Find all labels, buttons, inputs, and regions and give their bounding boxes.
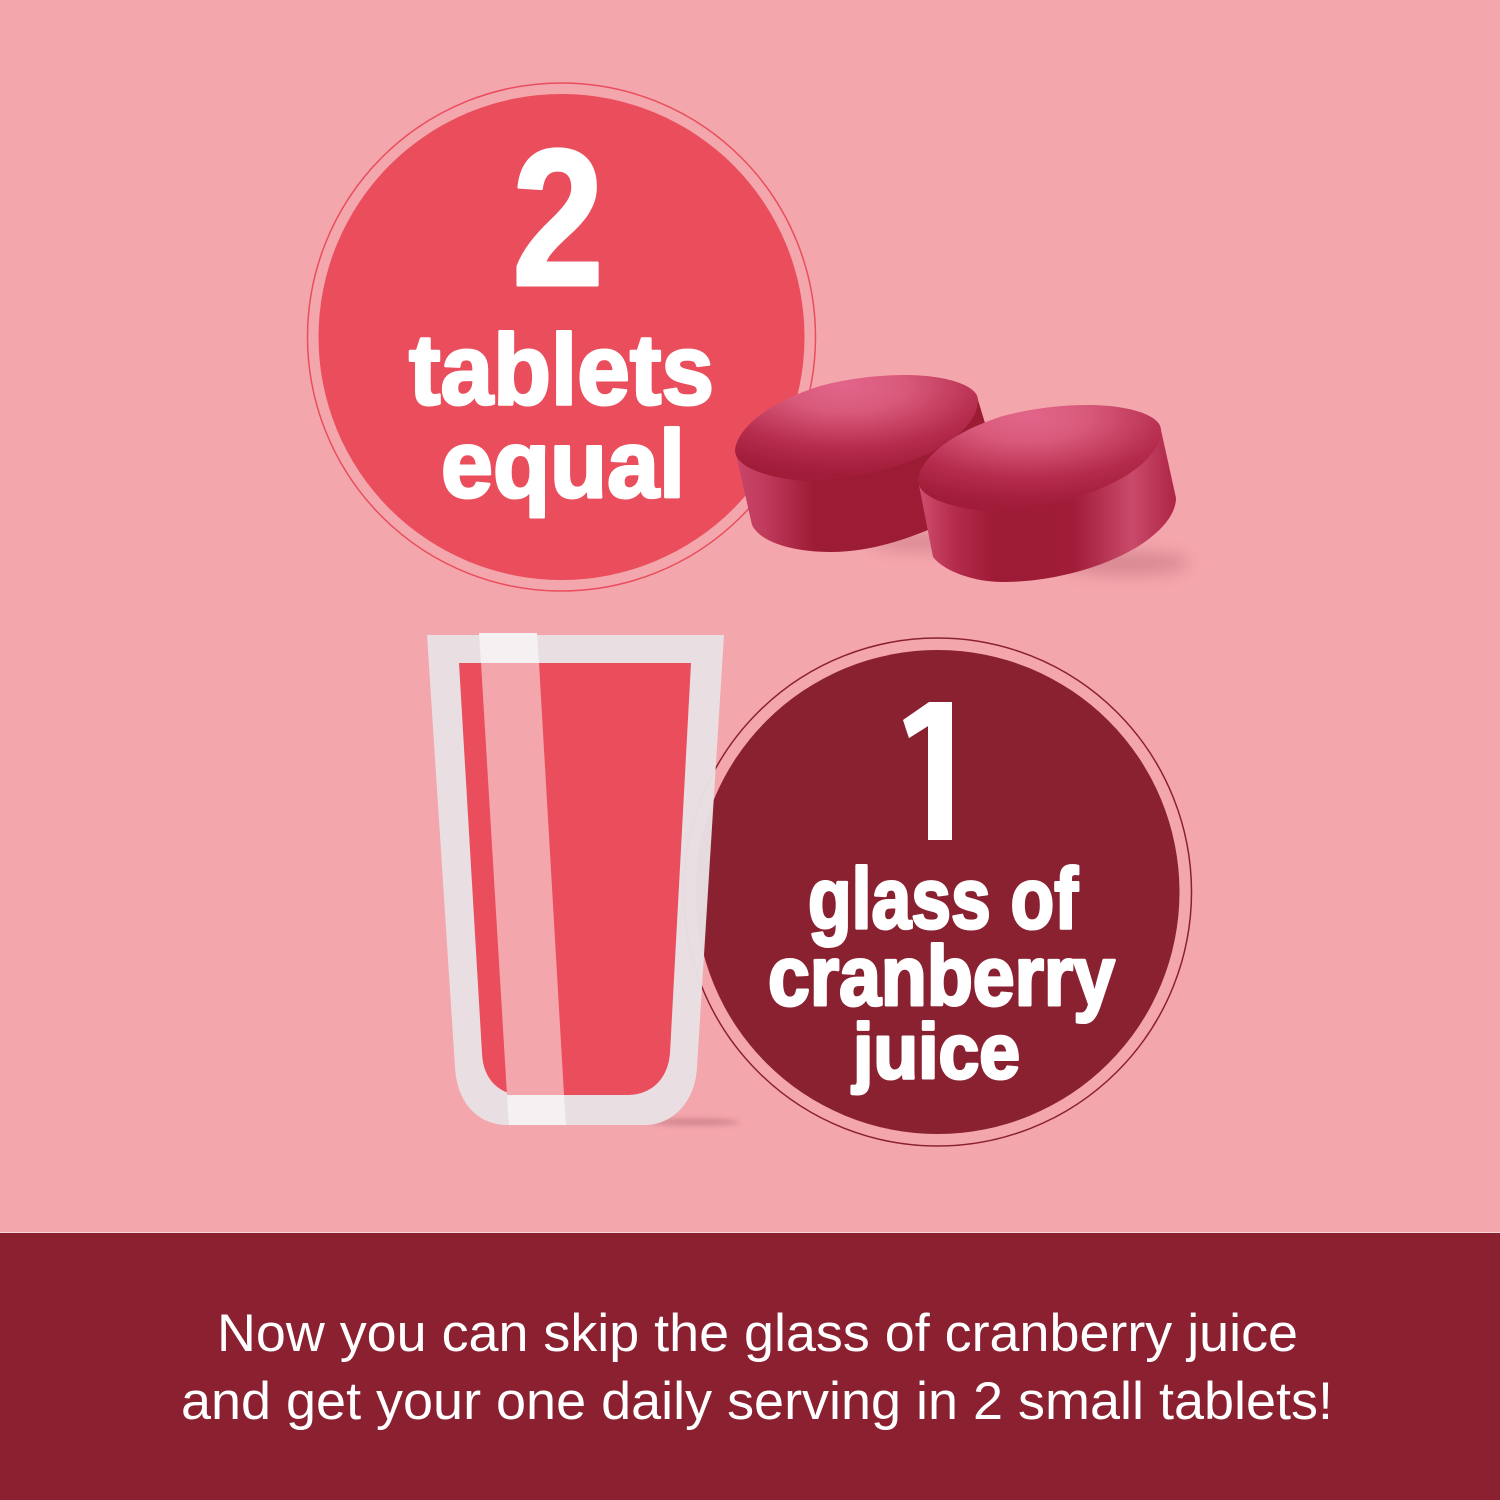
label: juice: juice [851, 1007, 1020, 1095]
badge disc [696, 650, 1180, 1134]
glass shadow [650, 1119, 740, 1125]
glass body [427, 635, 724, 1125]
label: tablets: tablets [409, 314, 714, 426]
bottom banner [0, 1232, 1500, 1500]
badge ring [308, 83, 816, 591]
icon: two cranberry tablets [735, 375, 1190, 582]
highlight on base [507, 1095, 566, 1125]
number 1: 1 [896, 664, 968, 882]
juice [459, 663, 691, 1095]
highlight on rim [479, 633, 539, 663]
banner background [0, 1233, 1500, 1500]
number 2: 2 [512, 109, 604, 327]
tablet one [735, 375, 985, 552]
badge disc [318, 94, 804, 580]
label: cranberry: cranberry [768, 929, 1115, 1023]
banner text line two: and get your one daily serving in 2 small tablets! [181, 1372, 1333, 1431]
circle badge: 1 glass of cranberry juice [684, 638, 1192, 1146]
badge ring [684, 638, 1192, 1146]
label: glass of: glass of [808, 851, 1078, 947]
tablet shadows [870, 533, 1190, 575]
glass highlight on juice [481, 663, 564, 1095]
label: equal: equal [441, 411, 685, 518]
banner text line one: Now you can skip the glass of cranberry juice [217, 1304, 1298, 1363]
circle badge: 2 tablets equal [308, 83, 816, 591]
tablet two [918, 405, 1176, 582]
icon: glass of cranberry juice [427, 633, 740, 1125]
number 1 [903, 702, 952, 840]
